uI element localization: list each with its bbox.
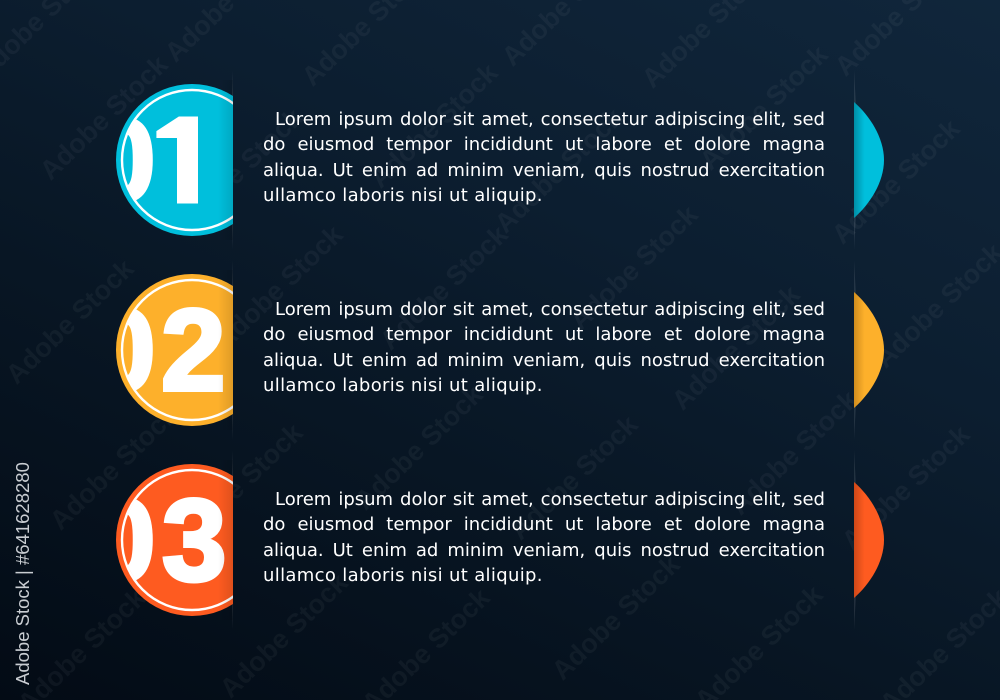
text block 2: aliqua. Ut enim ad minim veniam, quis nostrud exercitation — [263, 350, 825, 371]
watermark pattern: Adobe Stock — [169, 417, 309, 554]
text block 3: aliqua. Ut enim ad minim veniam, quis nostrud exercitation — [263, 540, 825, 561]
number 01 — [128, 116, 198, 204]
tab right 02 — [854, 292, 884, 408]
text block 1: ullamco laboris nisi ut aliquip. — [263, 185, 543, 206]
number 02: 0 — [91, 285, 156, 415]
tab right 03 — [854, 482, 884, 598]
number 01: 0 — [91, 95, 156, 225]
badge 01 — [116, 84, 233, 236]
watermark pattern: Adobe Stock — [564, 199, 704, 336]
watermark pattern: Adobe Stock — [209, 219, 349, 356]
badge 02 — [116, 274, 233, 426]
watermark pattern: Adobe Stock — [34, 49, 174, 186]
stock credit: Adobe Stock | #641628280 — [12, 462, 33, 685]
text block 2: do eiusmod tempor incididunt ut labore et dolore magna — [263, 324, 825, 345]
text block 3: Lorem ipsum dolor sit amet, consectetur adipiscing elit, sed — [275, 489, 825, 510]
text block 1 — [263, 109, 825, 206]
text block 2: ullamco laboris nisi ut aliquip. — [263, 375, 543, 396]
watermark pattern: Adobe Stock — [214, 567, 354, 700]
text block 3: do eiusmod tempor incididunt ut labore et dolore magna — [263, 514, 825, 535]
number 03: 3 — [162, 475, 227, 605]
number 02: 2 — [161, 285, 226, 415]
watermark pattern: Adobe Stock — [44, 399, 184, 536]
watermark pattern: Adobe Stock — [694, 39, 834, 176]
number 03 — [128, 497, 224, 584]
watermark pattern: Adobe Stock — [364, 57, 504, 194]
watermark pattern: Adobe Stock — [374, 219, 514, 356]
watermark pattern: Adobe Stock — [489, 102, 629, 239]
watermark pattern: Adobe Stock — [349, 379, 489, 516]
watermark pattern: Adobe Stock — [169, 102, 309, 239]
number 03: 0 — [91, 475, 156, 605]
watermark pattern: Adobe Stock — [666, 279, 806, 416]
watermark pattern: Adobe Stock — [724, 384, 864, 521]
badge 03 — [116, 464, 233, 616]
watermark pattern: Adobe Stock — [546, 549, 686, 686]
text block 3 — [263, 489, 825, 586]
watermark pattern: Adobe Stock — [504, 409, 644, 546]
number 01: 1 — [152, 95, 217, 225]
text block 2 — [263, 299, 825, 396]
text block 1: Lorem ipsum dolor sit amet, consectetur adipiscing elit, sed — [275, 109, 825, 130]
watermark pattern: Adobe Stock — [836, 419, 976, 556]
watermark pattern: Adobe Stock — [0, 253, 140, 390]
number 02 — [128, 307, 223, 392]
text block 1: aliqua. Ut enim ad minim veniam, quis nostrud exercitation — [263, 160, 825, 181]
watermark pattern: Adobe Stock — [826, 113, 966, 250]
panel edge slits — [229, 70, 859, 630]
text block 1: do eiusmod tempor incididunt ut labore et dolore magna — [263, 134, 825, 155]
text block 2: Lorem ipsum dolor sit amet, consectetur adipiscing elit, sed — [275, 299, 825, 320]
tab right 01 — [854, 102, 884, 218]
text block 3: ullamco laboris nisi ut aliquip. — [263, 565, 543, 586]
